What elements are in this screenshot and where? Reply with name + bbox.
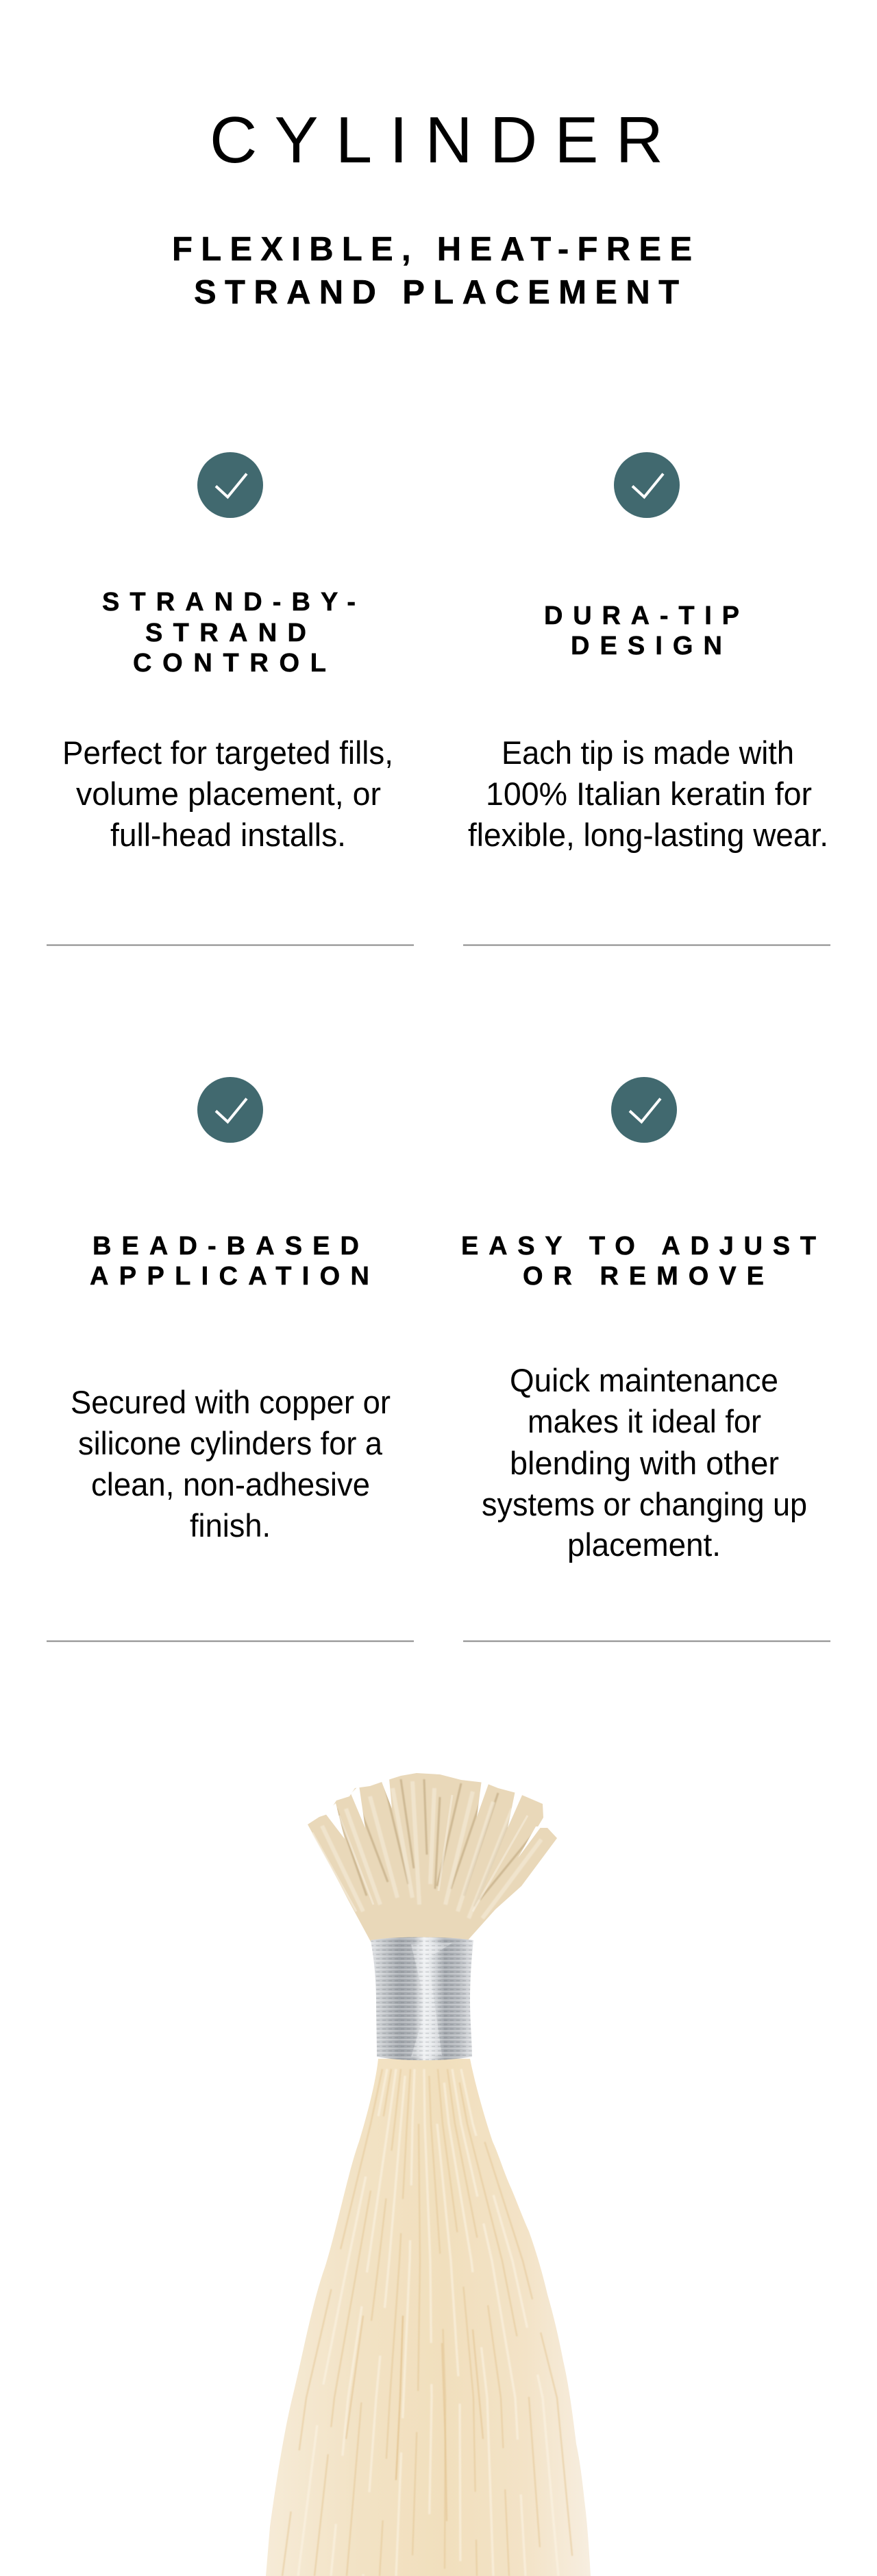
text: easy to adjust description: systems or changing up [482,1486,807,1522]
text: easy to adjust description: makes it ideal for [528,1403,761,1439]
panel: strand-by-strand control [62,452,393,853]
subtitle: FLEXIBLE, HEAT-FREE [172,231,692,268]
text: easy to adjust description [482,1362,807,1563]
panel: dura-tip design [468,452,828,853]
hair fan tips [308,1773,557,1942]
icon: check badge [611,1077,677,1143]
heading: strand-by-strand control: CONTROL [133,649,326,678]
illustration: keratin-tip hair strand with silver cylinder [266,1773,591,2576]
icon: check badge [197,452,263,518]
text: strand-by-strand description: volume placement, or [76,776,381,812]
text: bead-based description [71,1384,391,1544]
heading: dura-tip design [544,602,739,660]
text: strand-by-strand description: Perfect for targeted fills, [62,734,393,771]
text: bead-based description: silicone cylinders for a [78,1425,383,1461]
text: strand-by-strand description: full-head installs. [110,817,346,853]
heading: strand-by-strand control [102,588,356,678]
text: bead-based description: Secured with copper or [71,1384,391,1420]
heading: bead-based application [90,1232,369,1291]
text: bead-based description: clean, non-adhesive [91,1466,370,1502]
heading: easy to adjust or remove: OR REMOVE [523,1262,764,1291]
subtitle [172,231,692,311]
panel: easy to adjust or remove [461,1077,816,1563]
icon: check badge [197,1077,263,1143]
text: easy to adjust description: blending with other [510,1445,779,1481]
text: easy to adjust description: Quick maintenance [510,1362,778,1398]
icon: check badge [614,452,680,518]
heading: bead-based application: APPLICATION [90,1262,369,1291]
text: dura-tip description [468,734,828,853]
panel: bead-based application [71,1077,391,1544]
text: dura-tip description: flexible, long-lasting wear. [468,817,828,853]
heading: bead-based application: BEAD-BASED [92,1232,359,1261]
silver cylinder band [371,1937,473,2060]
text: dura-tip description: 100% Italian keratin for [486,776,812,812]
text: strand-by-strand description [62,734,393,853]
heading: dura-tip design: DURA-TIP [544,602,739,630]
subtitle: STRAND PLACEMENT [194,274,679,311]
title: CYLINDER [210,103,663,177]
text: dura-tip description: Each tip is made with [502,734,794,771]
text: easy to adjust description: placement. [567,1526,721,1563]
heading: easy to adjust or remove: EASY TO ADJUST [461,1232,816,1261]
heading: strand-by-strand control: STRAND [145,619,306,647]
heading: dura-tip design: DESIGN [571,632,722,660]
heading: easy to adjust or remove [461,1232,816,1291]
heading: strand-by-strand control: STRAND-BY- [102,588,356,617]
hair strand body [266,2059,591,2576]
text: bead-based description: finish. [190,1507,271,1544]
